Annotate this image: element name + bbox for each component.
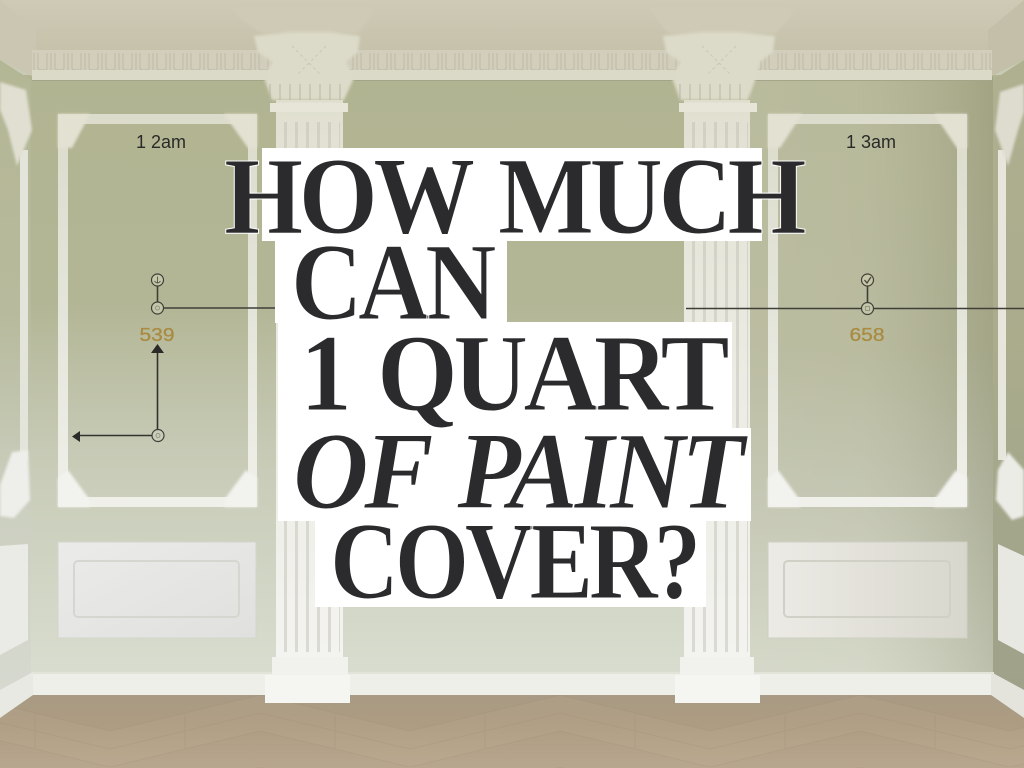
icon: check badge — [862, 274, 874, 286]
timeline: 12am — [72, 132, 280, 442]
dentil frieze — [32, 50, 992, 70]
right column — [650, 8, 792, 703]
frame ornaments — [58, 114, 257, 148]
wood floor — [0, 695, 1024, 768]
arrowhead left — [72, 431, 80, 442]
frame ornaments — [768, 114, 967, 148]
left side upper frame — [20, 150, 28, 460]
left column — [232, 8, 372, 703]
title line 1: HOW MUCH — [224, 135, 805, 257]
right panel upper frame — [768, 114, 967, 507]
right side lower panel — [998, 544, 1024, 654]
icon: end node — [152, 430, 164, 442]
right half wall tone — [750, 75, 993, 675]
right side upper frame — [998, 150, 1006, 460]
left side lower panel — [0, 544, 28, 655]
left side lower ornament — [0, 450, 30, 518]
value: 539: 539 — [140, 325, 174, 345]
left side upper ornament — [0, 82, 32, 166]
time label: 13am: 1 3am — [846, 132, 896, 152]
title backing strips — [262, 148, 762, 607]
title line 4: OF PAINT — [293, 410, 748, 532]
ceiling and cornice — [0, 0, 1024, 81]
title line 2: CAN — [291, 221, 495, 343]
time label: 12am: 1 2am — [136, 132, 186, 152]
arrowhead up — [151, 344, 164, 353]
shaft — [684, 100, 750, 660]
right side lower ornament — [996, 452, 1024, 520]
left panel upper frame — [58, 114, 257, 507]
base — [272, 657, 348, 675]
icon: node — [862, 302, 874, 314]
right lower panel — [768, 542, 967, 638]
capital — [650, 8, 792, 33]
icon: node — [152, 302, 164, 314]
right side wall — [993, 60, 1024, 690]
back wall — [0, 75, 1024, 675]
cornice lower band — [32, 70, 992, 80]
left lower panel — [58, 542, 256, 638]
shaft — [276, 100, 343, 660]
left side wall — [0, 60, 32, 690]
timeline: 13am — [686, 132, 1024, 345]
baseboard — [0, 672, 1024, 718]
title line 3: 1 QUART — [300, 312, 728, 434]
title — [224, 135, 805, 622]
connector lines — [158, 286, 280, 308]
capital — [232, 8, 372, 33]
window light on right wall — [750, 75, 993, 675]
title line 5: COVER? — [330, 500, 697, 622]
value: 658: 658 — [850, 325, 884, 345]
right side upper ornament — [995, 84, 1024, 166]
icon: anchor badge — [152, 274, 164, 286]
arrow up and left — [78, 352, 158, 436]
base — [680, 657, 754, 675]
connector lines — [686, 286, 1024, 308]
